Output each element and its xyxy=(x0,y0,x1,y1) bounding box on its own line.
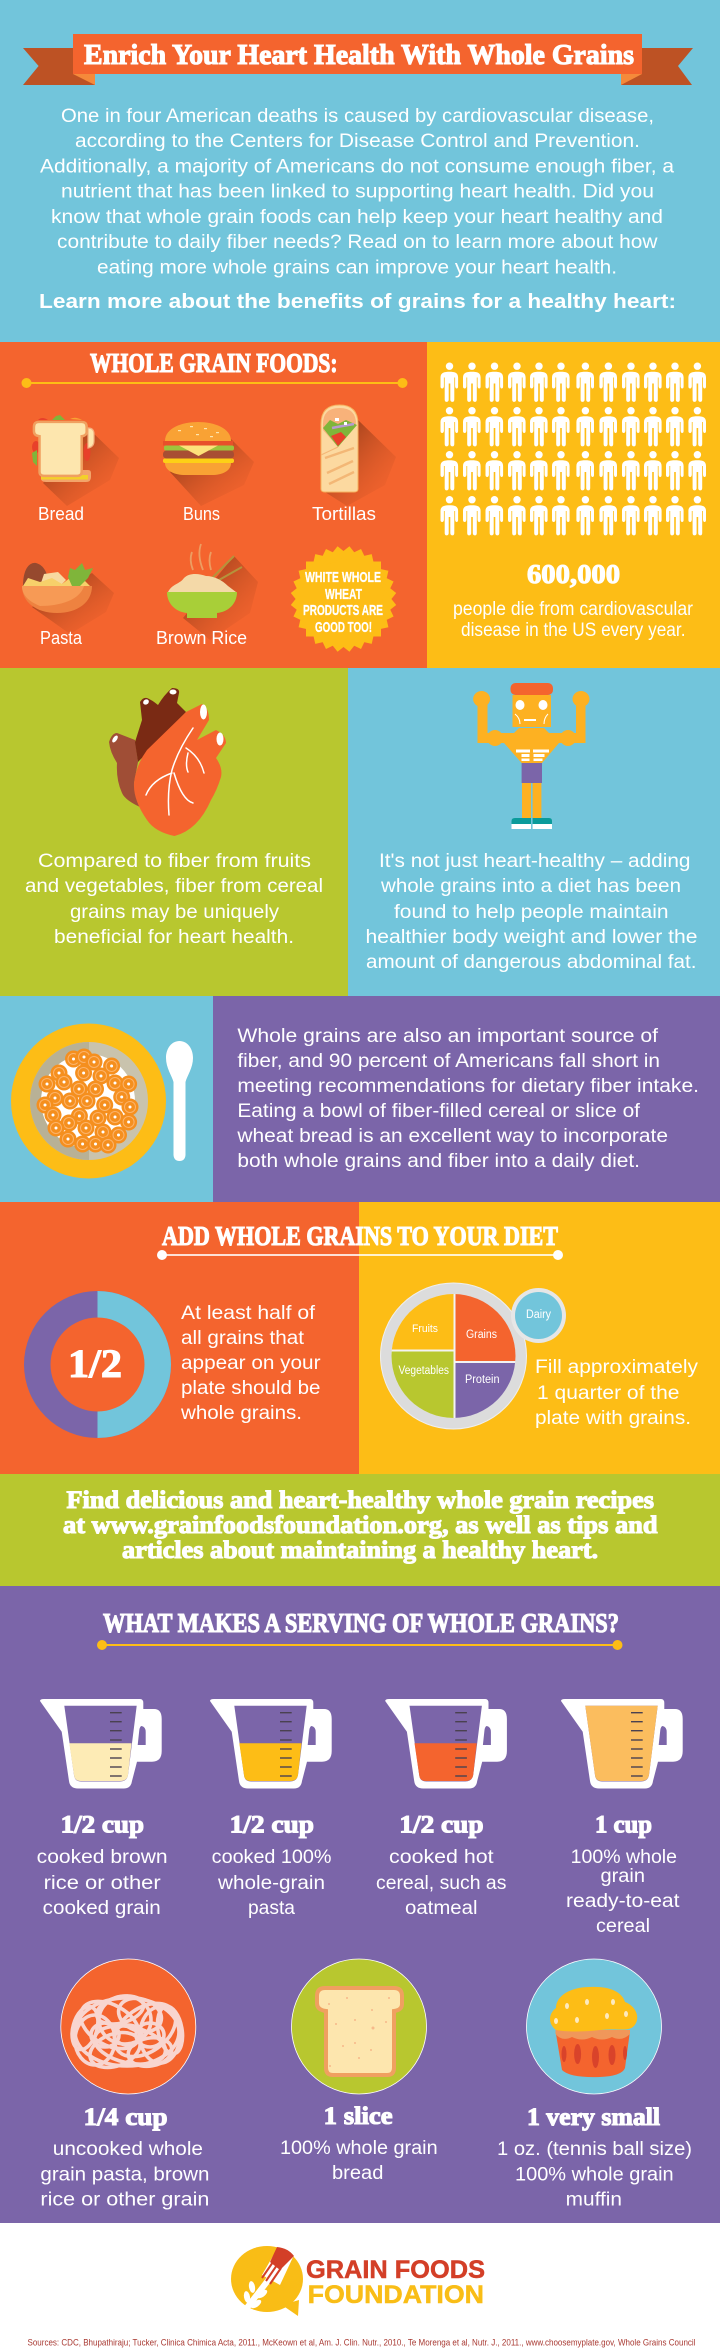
panel: fiber text: both whole grains and fiber into a daily diet. xyxy=(237,1151,640,1172)
icon grid: people xyxy=(440,362,706,535)
panel: 600,000 deaths xyxy=(427,342,720,668)
panel: cereal bowl background xyxy=(0,996,213,1202)
serving: 1/4 cup: uncooked whole xyxy=(53,2139,203,2160)
serving: 1 very small: 100% whole grain xyxy=(515,2165,674,2186)
text: fill a quarter: plate with grains. xyxy=(535,1408,691,1429)
text: half your grains: appear on your xyxy=(181,1353,321,1374)
serving: 1/2 cup hot cereal: cereal, such as xyxy=(376,1873,506,1894)
panel: intro background xyxy=(0,0,720,343)
panel: fiber text: Whole grains are also an important source of xyxy=(237,1026,659,1047)
serving: 1/2 cup brown rice: cooked brown xyxy=(37,1847,168,1868)
panel: recipes banner xyxy=(0,1474,720,1586)
wordmark: GRAIN FOODS xyxy=(306,2256,485,2284)
panel: recipes banner: articles about maintaining a healthy heart. xyxy=(122,1537,598,1564)
chart: one half donut: 1/2 xyxy=(68,1341,122,1386)
panel: fiber text xyxy=(213,996,720,1202)
panel: body weight xyxy=(348,668,720,996)
intro paragraph: eating more whole grains can improve your heart health. xyxy=(97,258,617,278)
text: fill a quarter: 1 quarter of the xyxy=(537,1383,680,1404)
stat caption xyxy=(453,599,694,641)
text: fill a quarter: Fill approximately xyxy=(535,1357,699,1378)
wordmark xyxy=(306,2256,485,2309)
serving: 1 slice: 1 slice xyxy=(324,2103,393,2130)
text: body weight and abdominal fat: healthier body weight and lower the xyxy=(366,927,698,948)
callout badge: white whole wheat xyxy=(291,546,396,652)
panel: whole grain foods xyxy=(0,342,427,668)
logo: Grain Foods Foundation xyxy=(231,2246,485,2316)
icon: bread slice circle xyxy=(292,1959,426,2094)
serving: 1 very small xyxy=(497,2104,692,2211)
serving: 1/2 cup brown rice: cooked grain xyxy=(43,1898,161,1919)
serving: 1 cup cereal: 1 cup xyxy=(595,1812,652,1839)
text: body weight and abdominal fat: found to help people maintain xyxy=(394,902,668,923)
icon: anatomical heart xyxy=(109,688,226,836)
serving: 1/2 cup hot cereal: oatmeal xyxy=(405,1898,478,1919)
text: fiber from cereal grains: grains may be uniquely xyxy=(70,902,280,923)
icon: measuring cup yellow xyxy=(210,1699,332,1788)
intro paragraph: according to the Centers for Disease Control and Prevention. xyxy=(75,131,640,152)
heading: whole grain foods: WHOLE GRAIN FOODS: xyxy=(90,348,338,378)
text: half your grains: plate should be xyxy=(181,1378,320,1399)
text: fill a quarter xyxy=(535,1357,699,1429)
stat caption: disease in the US every year. xyxy=(461,620,686,641)
text: body weight and abdominal fat: amount of dangerous abdominal fat. xyxy=(366,952,696,973)
icon: bread sandwich xyxy=(32,415,119,506)
stat caption: people die from cardiovascular xyxy=(453,599,694,620)
panel: plate background xyxy=(359,1202,720,1474)
chart: MyPlate: Dairy xyxy=(526,1309,551,1321)
label: brown rice: Brown Rice xyxy=(156,628,247,648)
serving: 1/2 cup pasta: 1/2 cup xyxy=(230,1812,314,1839)
icon: brown rice bowl xyxy=(167,544,258,640)
text: half your grains xyxy=(180,1303,321,1424)
callout badge: white whole wheat: WHEAT xyxy=(325,586,362,603)
panel: fiber text: meeting recommendations for dietary fiber intake. xyxy=(237,1076,699,1097)
text: fiber from cereal grains: and vegetables, fiber from cereal xyxy=(25,876,323,897)
text: fiber from cereal grains xyxy=(25,851,323,948)
text: fiber from cereal grains: Compared to fiber from fruits xyxy=(38,851,311,872)
panel: heart xyxy=(0,668,348,996)
chart: one half donut xyxy=(24,1291,171,1438)
intro paragraph: Additionally, a majority of Americans do not consume enough fiber, a xyxy=(40,156,674,178)
chart: MyPlate: Vegetables xyxy=(398,1365,449,1377)
text: half your grains: whole grains. xyxy=(180,1403,302,1424)
panel: fiber text: fiber, and 90 percent of Americans fall short in xyxy=(237,1051,660,1072)
heading rule xyxy=(157,1250,563,1260)
panel: fiber text: Eating a bowl of fiber-filled cereal or slice of xyxy=(237,1101,641,1122)
serving: 1 very small: 1 very small xyxy=(527,2104,660,2131)
serving: 1 very small: 1 oz. (tennis ball size) xyxy=(497,2139,692,2160)
icon: uncooked pasta circle xyxy=(61,1959,196,2094)
text: half your grains: At least half of xyxy=(181,1303,316,1324)
serving: 1/2 cup pasta: pasta xyxy=(248,1898,295,1919)
serving: 1/2 cup hot cereal xyxy=(376,1812,506,1919)
panel: half of grains xyxy=(0,1202,359,1474)
title banner xyxy=(23,34,693,85)
serving: 1/4 cup: 1/4 cup xyxy=(84,2104,168,2131)
serving: 1/4 cup: grain pasta, brown xyxy=(40,2165,209,2186)
heading rule xyxy=(97,1640,622,1650)
text: body weight and abdominal fat xyxy=(366,851,698,973)
serving: 1 slice xyxy=(280,2103,438,2184)
serving: 1 cup cereal: 100% whole xyxy=(571,1847,677,1868)
intro paragraph: nutrient that has been linked to supporting heart health. Did you xyxy=(61,182,654,203)
callout badge: white whole wheat: GOOD TOO! xyxy=(315,619,372,636)
callout badge: white whole wheat: PRODUCTS ARE xyxy=(303,602,383,619)
panel: recipes banner: Find delicious and heart-healthy whole grain recipes xyxy=(66,1487,654,1514)
panel: fiber text: wheat bread is an excellent way to incorporate xyxy=(236,1126,668,1147)
wordmark: FOUNDATION xyxy=(308,2281,484,2309)
serving: 1 cup cereal: cereal xyxy=(596,1916,650,1937)
serving: 1/2 cup brown rice: rice or other xyxy=(44,1873,161,1894)
icon: measuring cup full xyxy=(561,1699,683,1788)
chart: MyPlate: Fruits xyxy=(412,1323,438,1335)
icon: measuring cup cream xyxy=(40,1699,162,1788)
serving: 1/4 cup xyxy=(40,2104,209,2211)
serving: 1 slice: 100% whole grain xyxy=(280,2138,438,2159)
intro call to action: Learn more about the benefits of grains for a healthy heart: xyxy=(39,291,676,313)
serving: 1/2 cup hot cereal: 1/2 cup xyxy=(399,1812,484,1839)
serving: 1/2 cup brown rice: 1/2 cup xyxy=(61,1812,144,1839)
icon: cereal bowl xyxy=(11,1024,166,1178)
serving: 1/2 cup brown rice xyxy=(37,1812,168,1919)
serving: 1 cup cereal xyxy=(566,1812,680,1937)
title banner: Enrich Your Heart Health With Whole Grains xyxy=(84,39,634,71)
heading: what makes a serving: WHAT MAKES A SERVING OF WHOLE GRAINS? xyxy=(103,1608,619,1638)
chart: MyPlate xyxy=(380,1283,566,1429)
heading: add whole grains: ADD WHOLE GRAINS TO YOUR DIET xyxy=(162,1221,558,1251)
text: body weight and abdominal fat: It's not just heart-healthy – adding xyxy=(379,851,690,872)
serving: 1/2 cup pasta: whole-grain xyxy=(217,1873,325,1894)
label: tortillas: Tortillas xyxy=(312,504,376,524)
callout badge: white whole wheat: WHITE WHOLE xyxy=(305,569,381,586)
serving: 1 slice: bread xyxy=(332,2163,383,2184)
icon: burger bun xyxy=(163,422,254,506)
label: pasta: Pasta xyxy=(40,628,83,648)
intro paragraph: One in four American deaths is caused by cardiovascular disease, xyxy=(61,106,654,127)
serving: 1 very small: muffin xyxy=(566,2190,622,2211)
icon: muscular man xyxy=(473,683,590,829)
serving: 1/2 cup pasta xyxy=(212,1812,332,1919)
icon: spoon xyxy=(166,1041,193,1161)
serving: 1/4 cup: rice or other grain xyxy=(40,2190,209,2211)
text: body weight and abdominal fat: whole grains into a diet has been xyxy=(380,876,681,897)
stat: 600,000: 600,000 xyxy=(527,559,620,589)
icon: speech bubble with fork and wheat xyxy=(231,2246,303,2316)
serving: 1 cup cereal: ready-to-eat xyxy=(566,1891,680,1912)
text: half your grains: all grains that xyxy=(181,1328,305,1349)
panel: serving sizes xyxy=(0,1586,720,2223)
intro paragraph: know that whole grain foods can help keep your heart healthy and xyxy=(51,207,663,228)
icon: pasta bowl xyxy=(22,563,114,634)
panel: recipes banner: at www.grainfoodsfoundation.org, as well as tips and xyxy=(63,1512,658,1539)
serving: 1/2 cup pasta: cooked 100% xyxy=(212,1847,332,1868)
intro paragraph: contribute to daily fiber needs? Read on to learn more about how xyxy=(57,232,658,253)
chart: MyPlate: Grains xyxy=(466,1329,497,1341)
label: bread: Bread xyxy=(38,504,84,524)
serving: 1/2 cup hot cereal: cooked hot xyxy=(389,1847,494,1868)
text: fiber from cereal grains: beneficial for heart health. xyxy=(54,927,294,948)
chart: MyPlate: Protein xyxy=(465,1374,500,1386)
icon: muffin circle xyxy=(526,1959,662,2094)
heading rule xyxy=(22,378,408,388)
icon: tortilla wrap xyxy=(321,405,396,506)
intro paragraph xyxy=(40,106,674,278)
label: buns: Buns xyxy=(183,504,220,524)
icon: measuring cup orange xyxy=(385,1699,507,1788)
serving: 1 cup cereal: grain xyxy=(600,1866,645,1887)
